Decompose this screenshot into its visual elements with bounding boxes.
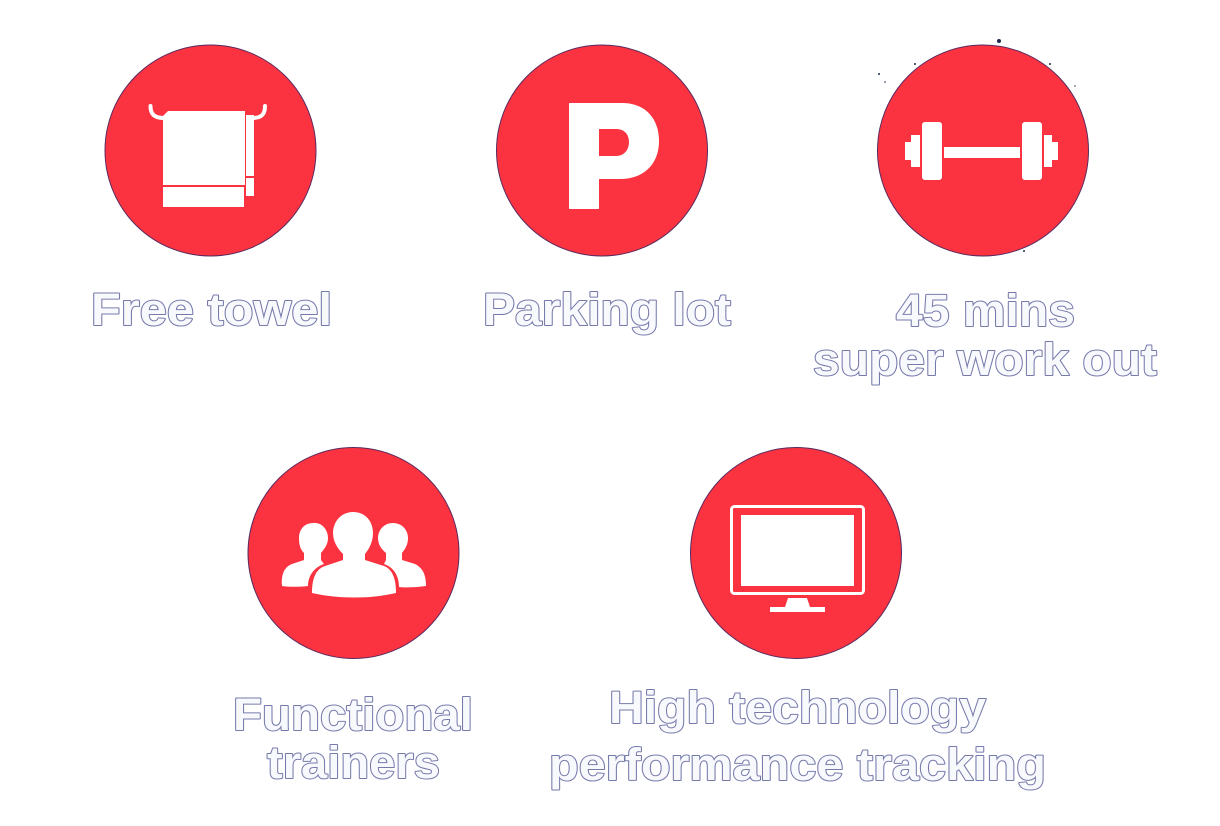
label: Free towel: Free towel	[91, 284, 332, 335]
panel: parking lot	[483, 45, 731, 335]
specks around circle	[878, 39, 1076, 252]
icon: red circle, parking	[496, 45, 708, 256]
panel: high technology performance tracking	[549, 448, 1046, 790]
label: High technology performance tracking: performance tracking	[549, 739, 1046, 790]
panel: free towel	[91, 45, 332, 335]
panel: functional trainers	[233, 448, 473, 788]
icon: towel	[150, 106, 265, 207]
icon: letter P	[569, 103, 659, 209]
label: High technology performance tracking	[549, 682, 1046, 790]
icon: monitor	[732, 506, 864, 612]
label: 45 mins super work out: super work out	[813, 334, 1157, 385]
label: Functional trainers	[233, 689, 473, 788]
panel: 45 mins super work out	[813, 39, 1157, 385]
icon: three people	[282, 512, 426, 598]
icon: dumbbell	[905, 122, 1058, 180]
label: Parking lot: Parking lot	[483, 284, 731, 335]
label: Functional trainers: Functional	[233, 689, 473, 740]
label: 45 mins super work out: 45 mins	[896, 285, 1075, 336]
icon: red circle, workout	[878, 45, 1088, 256]
label: Functional trainers: trainers	[267, 737, 440, 788]
icon: red circle, trainers	[248, 448, 459, 658]
icon: red circle, towel	[105, 45, 316, 256]
label: 45 mins super work out	[813, 285, 1157, 385]
icon: red circle, tracking	[690, 448, 902, 658]
label: High technology performance tracking: High technology	[609, 682, 986, 733]
